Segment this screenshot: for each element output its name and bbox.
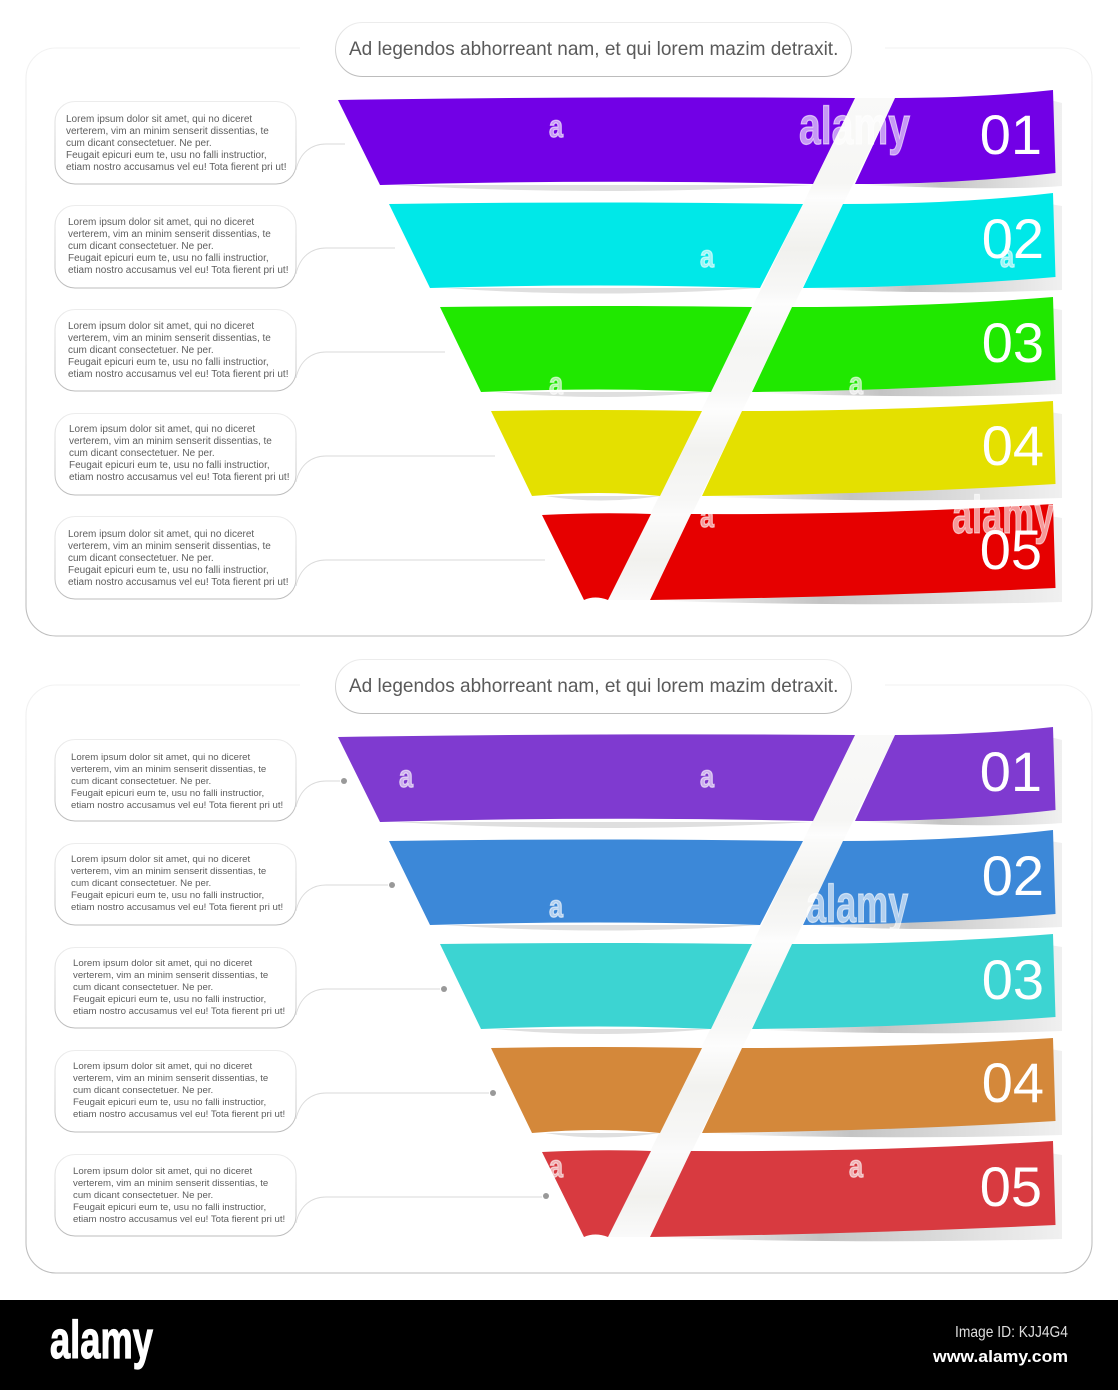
- panel: bottom funnel, muted colours: [26, 660, 1092, 1273]
- band 04: [491, 1038, 1062, 1138]
- band 02: [389, 830, 1062, 930]
- band 03: 03: [982, 948, 1044, 1011]
- callout 5: Feugait epicuri eum te, usu no falli instructior,: [68, 565, 269, 576]
- callout 5: Feugait epicuri eum te, usu no falli instructior,: [73, 1202, 266, 1213]
- callout 1: [55, 102, 345, 184]
- callout 1: cum dicant consectetuer. Ne per.: [71, 776, 211, 787]
- callout 5: verterem, vim an minim senserit dissentias, te: [68, 541, 271, 552]
- callout 4: verterem, vim an minim senserit dissentias, te: [69, 436, 272, 447]
- callout 1: [55, 740, 347, 821]
- website: www.alamy.com: [932, 1347, 1068, 1366]
- panel outline: [26, 48, 1092, 636]
- footer logo: alamy: [50, 1310, 153, 1370]
- watermarks: a: [1000, 239, 1014, 275]
- heading pill: Ad legendos abhorreant nam, et qui lorem mazim detraxit.: [349, 39, 838, 60]
- band 03: 03: [982, 311, 1044, 374]
- watermarks: alamy: [952, 485, 1054, 545]
- band 03: [440, 297, 1062, 397]
- watermarks: a: [549, 109, 563, 145]
- band 02: 02: [982, 844, 1044, 907]
- watermarks: a: [549, 1149, 563, 1185]
- callout 4: [55, 1050, 496, 1132]
- band 01: 01: [980, 740, 1042, 803]
- callout 2: verterem, vim an minim senserit dissentias, te: [68, 229, 271, 240]
- watermarks: a: [849, 1149, 863, 1185]
- callout 2: cum dicant consectetuer. Ne per.: [68, 241, 214, 252]
- watermarks: [399, 96, 1054, 1185]
- band 04: [491, 401, 1062, 500]
- callout 5: cum dicant consectetuer. Ne per.: [68, 553, 214, 564]
- panel outline: [26, 685, 1092, 1273]
- band 03: [440, 934, 1062, 1034]
- callout 1: Feugait epicuri eum te, usu no falli instructior,: [66, 150, 267, 161]
- funnel diagonal strip: [608, 98, 895, 600]
- callout 4: Lorem ipsum dolor sit amet, qui no diceret: [69, 424, 255, 435]
- band 01: [338, 90, 1062, 191]
- callout 3: [55, 948, 447, 1028]
- heading pill: Ad legendos abhorreant nam, et qui lorem mazim detraxit.: [349, 676, 838, 697]
- callout 4: verterem, vim an minim senserit dissentias, te: [73, 1073, 268, 1084]
- band 05: [542, 504, 1062, 604]
- band 04: 04: [982, 1051, 1044, 1114]
- callout 4: Feugait epicuri eum te, usu no falli instructior,: [73, 1097, 266, 1108]
- band 01: [338, 727, 1062, 828]
- callout 5: cum dicant consectetuer. Ne per.: [73, 1190, 213, 1201]
- funnel diagonal strip: [608, 735, 895, 1237]
- watermarks: a: [549, 366, 563, 402]
- callout 3: Feugait epicuri eum te, usu no falli instructior,: [68, 357, 269, 368]
- image id: Image ID: KJJ4G4: [955, 1324, 1068, 1341]
- callout 3: etiam nostro accusamus vel eu! Tota fierent pri ut!: [68, 369, 288, 380]
- band 05: 05: [980, 1155, 1042, 1218]
- callout 2: Feugait epicuri eum te, usu no falli instructior,: [68, 253, 269, 264]
- heading pill: [336, 22, 852, 76]
- band 02: 02: [982, 207, 1044, 270]
- watermarks: a: [700, 499, 714, 535]
- callout 4: cum dicant consectetuer. Ne per.: [73, 1085, 213, 1096]
- callout 2: verterem, vim an minim senserit dissentias, te: [71, 866, 266, 877]
- band 01: 01: [980, 103, 1042, 166]
- callout 3: verterem, vim an minim senserit dissentias, te: [68, 333, 271, 344]
- callout 3: [55, 310, 445, 391]
- callout 2: Feugait epicuri eum te, usu no falli instructior,: [71, 890, 264, 901]
- callout 4: Lorem ipsum dolor sit amet, qui no diceret: [73, 1061, 253, 1072]
- callout 1: Lorem ipsum dolor sit amet, qui no diceret: [71, 752, 251, 763]
- watermarks: alamy: [799, 96, 910, 155]
- watermarks: alamy: [806, 874, 908, 934]
- watermarks: a: [549, 889, 563, 925]
- callout 1: etiam nostro accusamus vel eu! Tota fierent pri ut!: [66, 162, 286, 173]
- watermarks: a: [399, 759, 413, 795]
- callout 2: etiam nostro accusamus vel eu! Tota fierent pri ut!: [68, 265, 288, 276]
- callout 2: Lorem ipsum dolor sit amet, qui no diceret: [71, 854, 251, 865]
- callout 2: [55, 844, 395, 925]
- callout 1: verterem, vim an minim senserit dissentias, te: [71, 764, 266, 775]
- band 02: [389, 193, 1062, 294]
- callout 5: [55, 1154, 549, 1236]
- callout 4: etiam nostro accusamus vel eu! Tota fierent pri ut!: [73, 1109, 285, 1120]
- callout 2: Lorem ipsum dolor sit amet, qui no diceret: [68, 217, 254, 228]
- callout 1: etiam nostro accusamus vel eu! Tota fierent pri ut!: [71, 800, 283, 811]
- callout 3: cum dicant consectetuer. Ne per.: [68, 345, 214, 356]
- callout 1: Lorem ipsum dolor sit amet, qui no diceret: [66, 114, 252, 125]
- callout 4: etiam nostro accusamus vel eu! Tota fierent pri ut!: [69, 472, 289, 483]
- heading pill: [336, 660, 852, 714]
- callout 5: etiam nostro accusamus vel eu! Tota fierent pri ut!: [68, 577, 288, 588]
- callout 3: Lorem ipsum dolor sit amet, qui no diceret: [68, 321, 254, 332]
- callout 4: cum dicant consectetuer. Ne per.: [69, 448, 215, 459]
- watermarks: a: [849, 366, 863, 402]
- callout 1: verterem, vim an minim senserit dissentias, te: [66, 126, 269, 137]
- callout 1: cum dicant consectetuer. Ne per.: [66, 138, 212, 149]
- callout 3: cum dicant consectetuer. Ne per.: [73, 982, 213, 993]
- band 05: [542, 1141, 1062, 1241]
- watermarks: a: [700, 759, 714, 795]
- callout 2: etiam nostro accusamus vel eu! Tota fierent pri ut!: [71, 902, 283, 913]
- callout 5: Lorem ipsum dolor sit amet, qui no diceret: [73, 1166, 253, 1177]
- callout 5: verterem, vim an minim senserit dissentias, te: [73, 1178, 268, 1189]
- callout 3: Lorem ipsum dolor sit amet, qui no diceret: [73, 958, 253, 969]
- callout 3: Feugait epicuri eum te, usu no falli instructior,: [73, 994, 266, 1005]
- callout 5: Lorem ipsum dolor sit amet, qui no diceret: [68, 529, 254, 540]
- watermarks: a: [700, 239, 714, 275]
- callout 5: [55, 516, 545, 599]
- callout 5: etiam nostro accusamus vel eu! Tota fierent pri ut!: [73, 1214, 285, 1225]
- panel: top funnel, vivid colours: [26, 22, 1092, 636]
- band 05: 05: [980, 518, 1042, 581]
- callout 2: cum dicant consectetuer. Ne per.: [71, 878, 211, 889]
- callout 2: [55, 206, 395, 288]
- callout 3: etiam nostro accusamus vel eu! Tota fierent pri ut!: [73, 1006, 285, 1017]
- callout 3: verterem, vim an minim senserit dissentias, te: [73, 970, 268, 981]
- callout 4: [55, 414, 495, 495]
- band 04: 04: [982, 414, 1044, 477]
- callout 4: Feugait epicuri eum te, usu no falli instructior,: [69, 460, 270, 471]
- footer bar: [0, 1300, 1118, 1390]
- callout 1: Feugait epicuri eum te, usu no falli instructior,: [71, 788, 264, 799]
